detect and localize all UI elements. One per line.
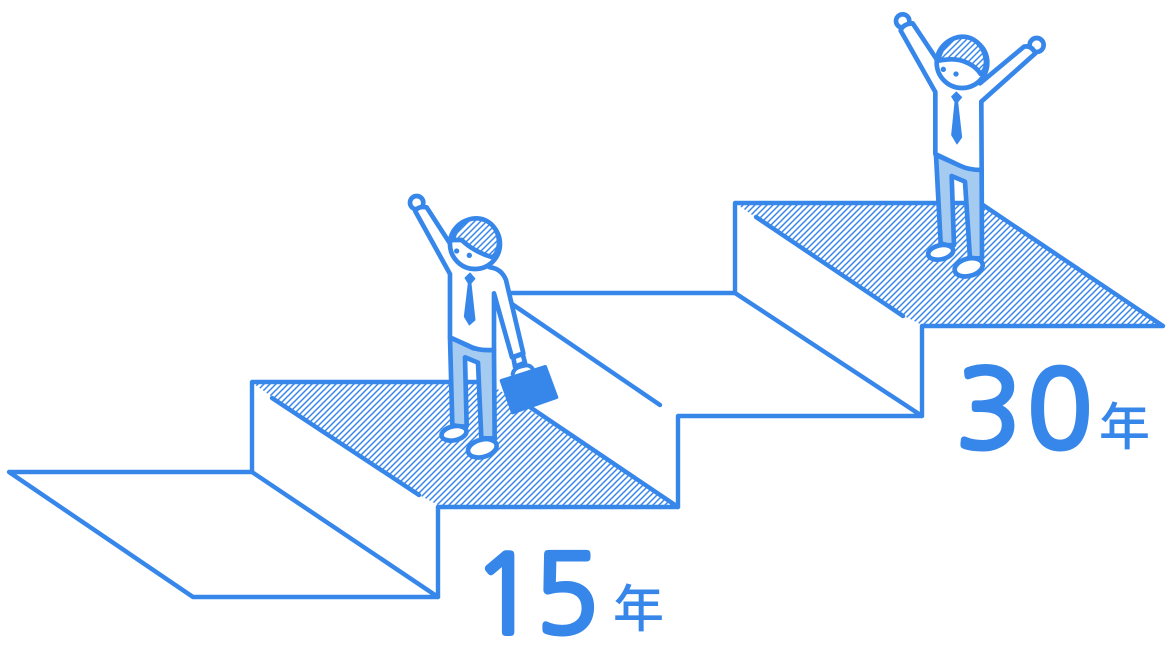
staircase: middle step xyxy=(512,293,922,507)
raised hands xyxy=(896,14,1044,52)
briefcase xyxy=(501,367,557,413)
staircase: hatched 30-year landing xyxy=(735,203,1163,416)
head with hatched hair xyxy=(937,37,987,88)
trousers xyxy=(450,337,495,438)
label: 30 years xyxy=(956,356,1150,464)
shoes xyxy=(927,243,985,279)
necktie xyxy=(464,273,475,325)
label: 30 years: 3 xyxy=(956,356,1021,464)
necktie xyxy=(952,92,962,144)
cuff and hand xyxy=(513,354,525,367)
staircase: hatched 15-year landing xyxy=(252,382,678,507)
label: 15 years: 年 xyxy=(613,581,664,638)
label: 30 years: 0 xyxy=(1027,356,1092,464)
briefcase handle xyxy=(513,365,533,374)
raised hand xyxy=(410,196,423,209)
label: 15 years xyxy=(472,541,664,648)
torso and arms xyxy=(901,23,1035,170)
trousers xyxy=(936,155,982,258)
shoes xyxy=(440,424,499,460)
staircase: bottom step xyxy=(9,472,438,597)
figure: worker with briefcase, one arm raised xyxy=(410,196,557,460)
torso and raised arm xyxy=(415,207,523,357)
head with hatched hair xyxy=(450,218,500,269)
label: 30 years: 年 xyxy=(1099,399,1150,456)
figure: worker with both arms raised xyxy=(896,14,1044,279)
label: 15 years: 1 xyxy=(472,541,537,648)
label: 15 years: 5 xyxy=(534,541,599,648)
